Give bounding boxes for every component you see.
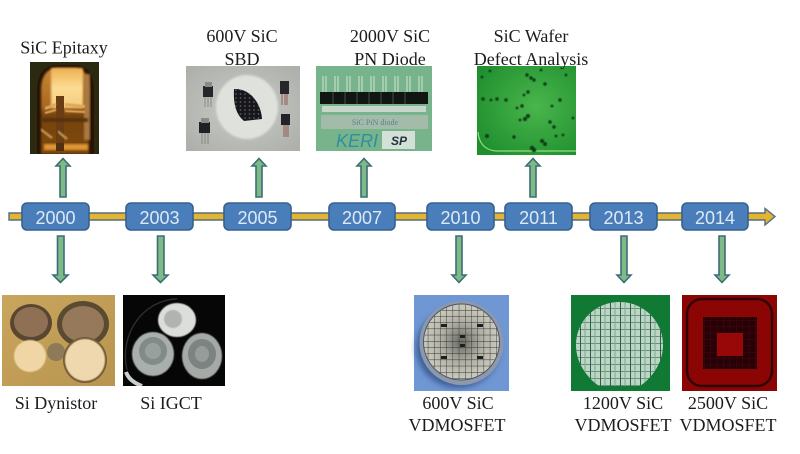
year box: 2003: 2003 xyxy=(139,208,180,228)
photo: Si dynistor discs xyxy=(2,295,115,386)
year box: 2013 xyxy=(590,203,657,230)
up arrow: 2011 xyxy=(526,158,540,197)
photo: 2000V SiC PN diode board xyxy=(316,66,432,151)
up arrow: 2007 xyxy=(357,158,371,197)
photo: 600V SiC SBD wafer and packages xyxy=(186,66,300,151)
label: 1200V SiC VDMOSFET xyxy=(574,393,672,435)
label: 600V SiC VDMOSFET: VDMOSFET xyxy=(408,415,506,435)
year box: 2005: 2005 xyxy=(237,208,278,228)
photo: SiC wafer defect analysis xyxy=(477,66,576,155)
label: 600V SiC VDMOSFET xyxy=(408,393,506,435)
label: SiC Wafer Defect Analysis: SiC Wafer xyxy=(494,26,568,46)
label: Si IGCT: Si IGCT xyxy=(140,393,202,413)
down arrow: 2014 xyxy=(715,236,729,282)
photo: 2000V SiC PN diode board: SiC PiN diode xyxy=(352,118,399,127)
down arrow: 2013 xyxy=(617,236,631,282)
year box: 2011 xyxy=(505,203,572,230)
up arrow: 2000 xyxy=(56,158,70,197)
year box: 2003 xyxy=(126,203,193,230)
label: SiC Epitaxy: SiC Epitaxy xyxy=(20,38,108,58)
label: 600V SiC SBD: SBD xyxy=(224,49,260,69)
label: Si Dynistor: Si Dynistor xyxy=(15,393,97,413)
photo: 2000V SiC PN diode board: SP xyxy=(391,134,408,148)
down arrow: 2003 xyxy=(153,236,168,282)
year box: 2014 xyxy=(682,203,748,230)
photo: SiC epitaxy reactor xyxy=(30,62,99,154)
year box: 2011: 2011 xyxy=(519,208,558,228)
label: 1200V SiC VDMOSFET: 1200V SiC xyxy=(583,393,663,413)
label: 600V SiC SBD xyxy=(206,26,278,69)
label: SiC Wafer Defect Analysis: Defect Analysis xyxy=(474,49,588,69)
up arrow: 2005 xyxy=(252,158,266,197)
component: transistor packages xyxy=(199,81,290,144)
photo: 600V SiC VDMOSFET wafer xyxy=(414,295,509,391)
label: 600V SiC SBD: 600V SiC xyxy=(206,26,278,46)
down arrow: 2010 xyxy=(452,236,466,282)
down arrow: 2000 xyxy=(53,236,68,282)
year box: 2000: 2000 xyxy=(35,208,76,228)
label: 2000V SiC PN Diode: PN Diode xyxy=(354,49,426,69)
year box: 2013: 2013 xyxy=(603,208,644,228)
label: 600V SiC VDMOSFET: 600V SiC xyxy=(422,393,494,413)
label: 2000V SiC PN Diode: 2000V SiC xyxy=(350,26,430,46)
year box: 2010: 2010 xyxy=(440,208,481,228)
year box: 2007 xyxy=(329,203,395,230)
timeline: horizontal arrow xyxy=(9,208,775,225)
label: 1200V SiC VDMOSFET: VDMOSFET xyxy=(574,415,672,435)
component: quarter wafer xyxy=(234,89,262,121)
label: 2500V SiC VDMOSFET: VDMOSFET xyxy=(679,415,777,435)
year box: 2014: 2014 xyxy=(695,208,735,228)
label: 2500V SiC VDMOSFET: 2500V SiC xyxy=(688,393,768,413)
year box: 2005 xyxy=(224,203,291,230)
year box: 2000 xyxy=(22,203,89,230)
photo: 1200V SiC VDMOSFET wafer xyxy=(571,295,670,391)
year box: 2010 xyxy=(427,203,494,230)
photo: 2500V SiC VDMOSFET die xyxy=(682,295,777,391)
photo: Si IGCT discs xyxy=(123,295,225,386)
photo: 2000V SiC PN diode board: KERI xyxy=(336,131,378,151)
label: 2000V SiC PN Diode xyxy=(350,26,430,69)
year box: 2007: 2007 xyxy=(342,208,382,228)
label: SiC Wafer Defect Analysis xyxy=(474,26,588,69)
label: 2500V SiC VDMOSFET xyxy=(679,393,777,435)
